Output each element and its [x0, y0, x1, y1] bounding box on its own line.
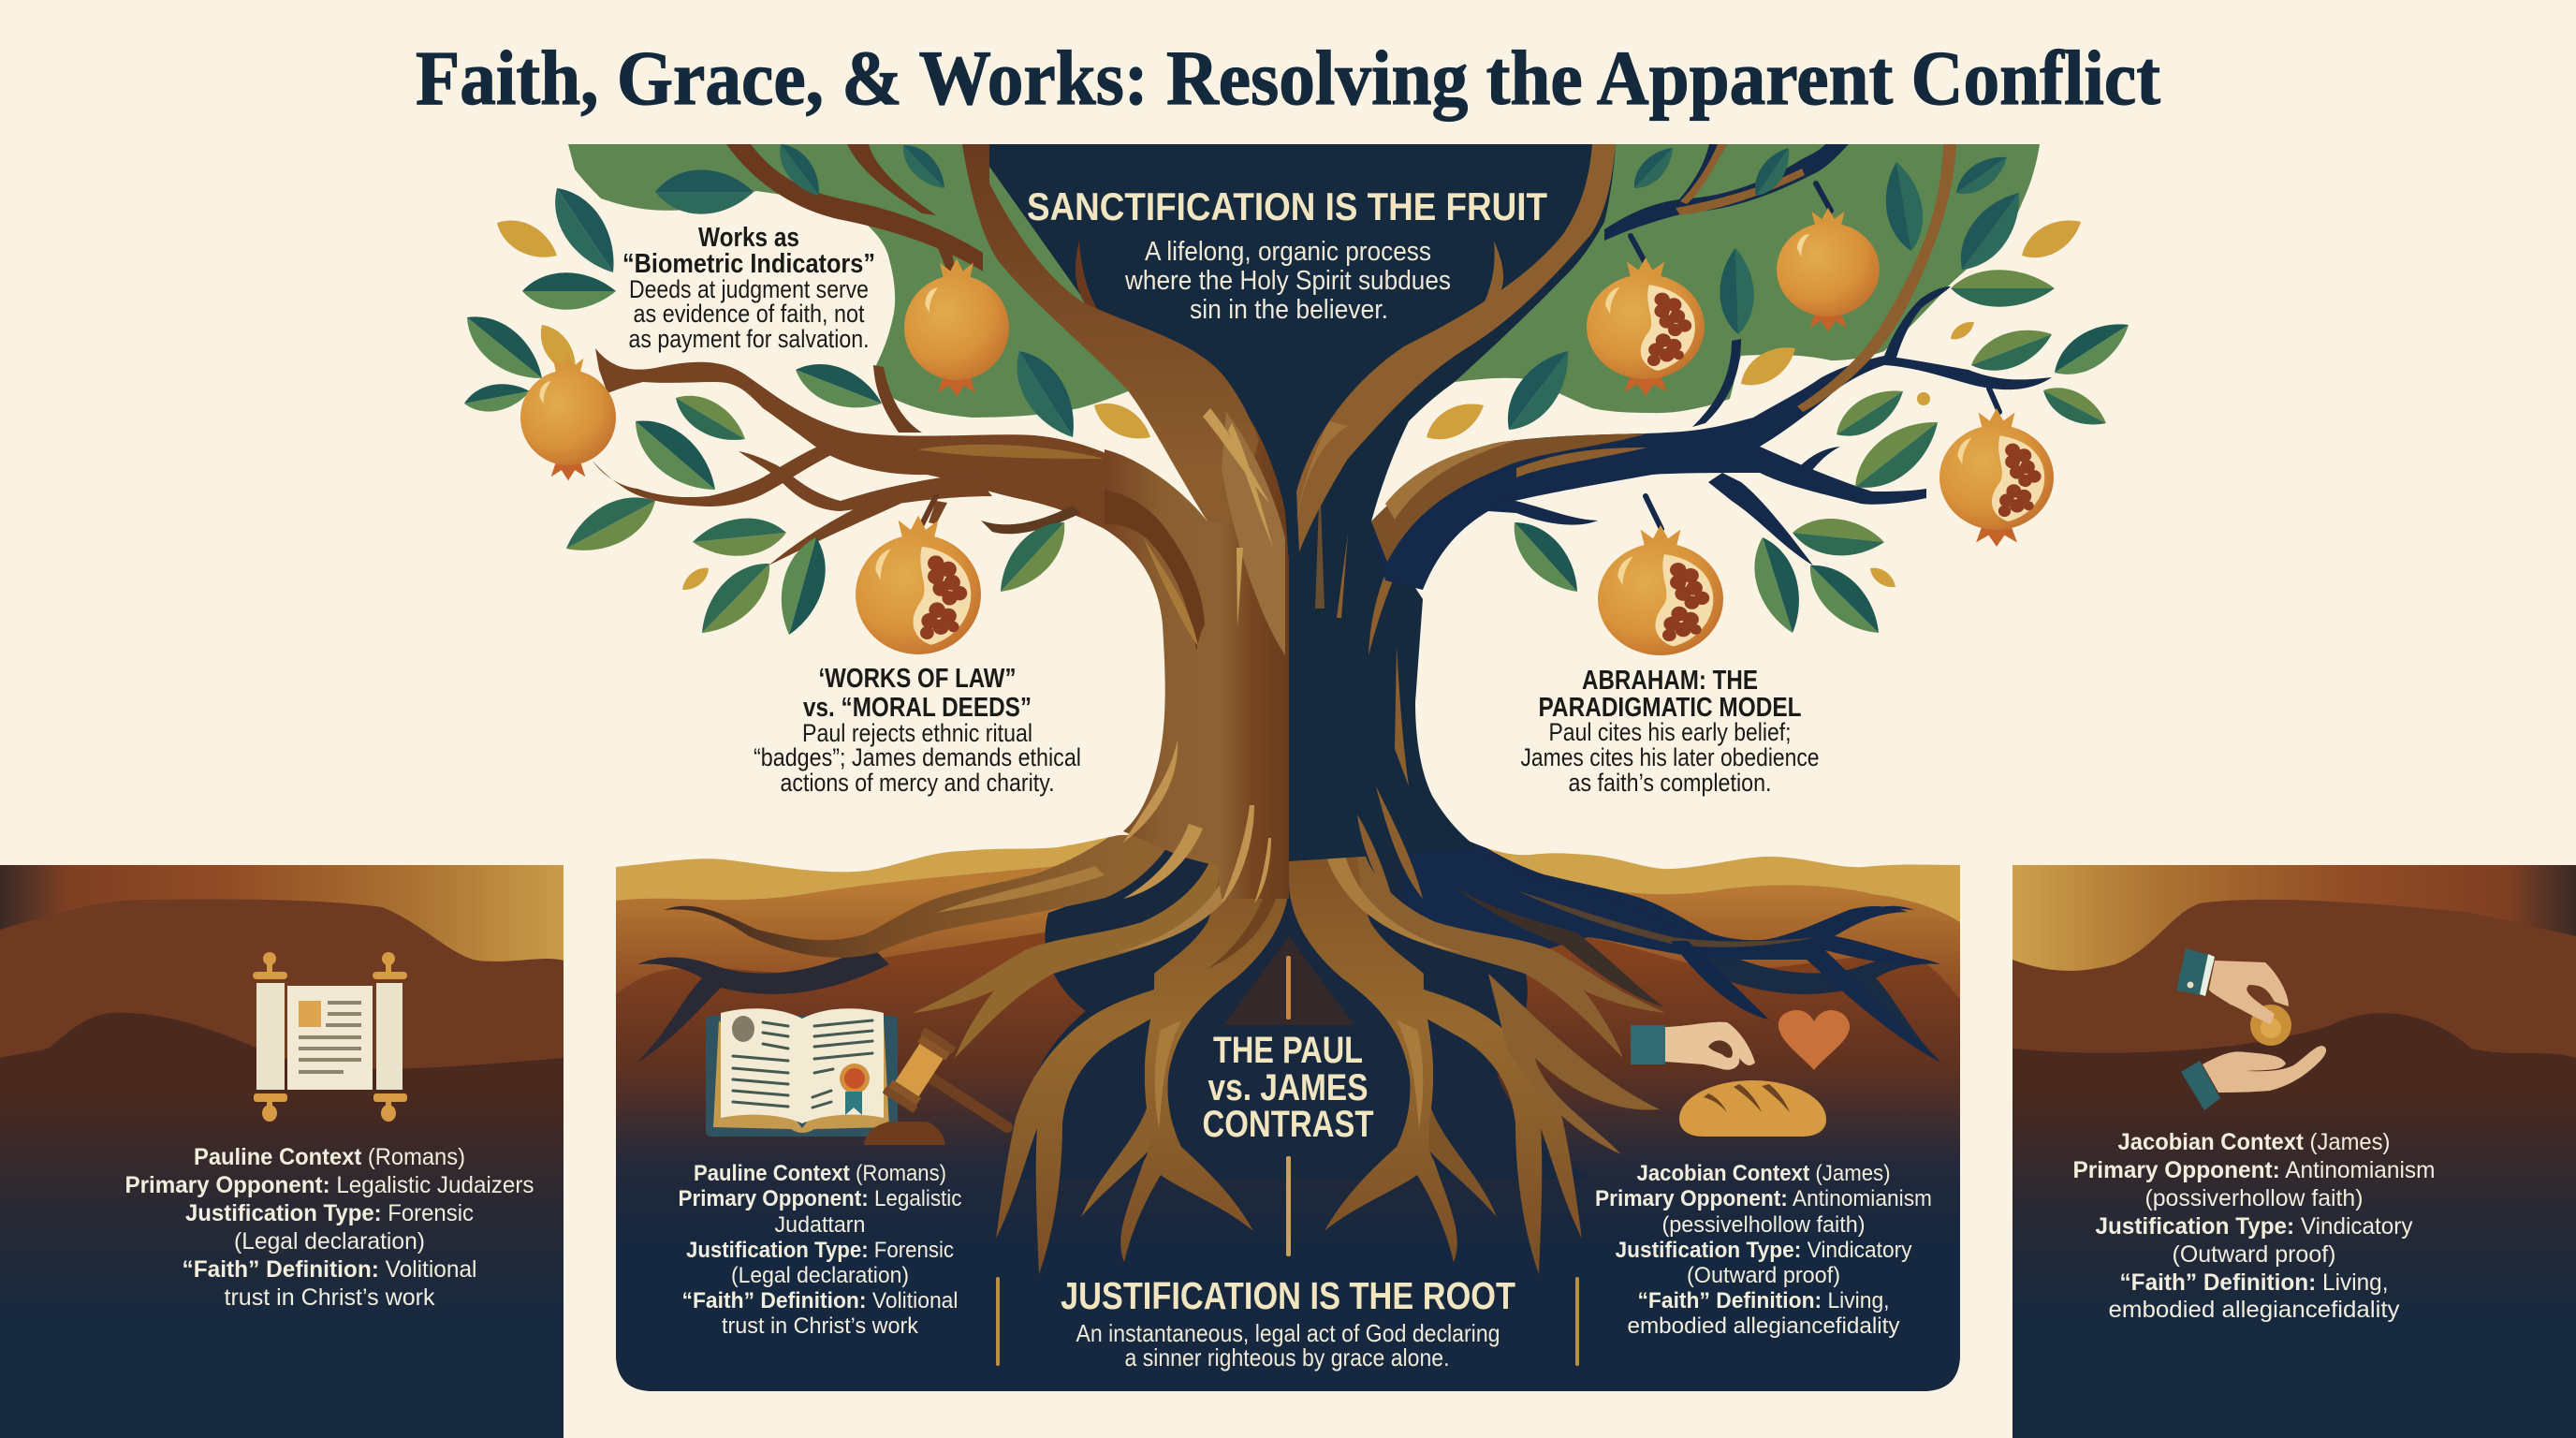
text block: Abraham the paradigmatic model	[1520, 666, 1820, 797]
text block: Abraham the paradigmatic model: ABRAHAM: THE	[1582, 666, 1758, 696]
fruit: top right whole pomegranate	[1777, 208, 1880, 331]
heading: the Paul vs James contrast	[1202, 1030, 1374, 1145]
text block: works as biometric indicators: “Biometric Indicators”	[622, 249, 875, 279]
text block: center Pauline context: trust in Christ’s work	[722, 1313, 919, 1339]
text block: Jacobian context: (Outward proof)	[2172, 1241, 2336, 1268]
leaves: right side	[1420, 140, 2138, 646]
text block: Jacobian context: Primary Opponent: Antinomianism	[2072, 1157, 2436, 1183]
text block: center Jacobian context: (Outward proof)	[1687, 1263, 1840, 1288]
text block: Pauline context: trust in Christ’s work	[225, 1284, 435, 1311]
fruit: upper left whole pomegranate	[904, 258, 1009, 397]
text block: works of law vs moral deeds: “badges”; James demands ethical	[754, 743, 1081, 771]
text block: Pauline context: Primary Opponent: Legalistic Judaizers	[125, 1172, 534, 1198]
icon: heart	[1778, 1010, 1850, 1070]
panel: navy sanctification background and right trunk	[973, 144, 1616, 861]
tree: left limbs and branches	[593, 144, 1208, 599]
root: right dark brown strands	[1454, 887, 1817, 1020]
icon: open book with seal	[706, 1008, 898, 1137]
text block: justification description: a sinner righteous by grace alone.	[1125, 1343, 1449, 1372]
separator: lower right	[1575, 1277, 1579, 1366]
navy shadow beneath the roots	[1011, 829, 1591, 1180]
text block: Pauline context: Pauline Context (Romans)	[194, 1144, 465, 1170]
heading: sanctification: SANCTIFICATION IS THE FRUIT	[1027, 184, 1547, 228]
text block: works as biometric indicators	[622, 223, 875, 353]
panel: left Pauline context	[0, 865, 564, 1438]
tree: brown highlights on right limbs	[1371, 144, 1956, 562]
separator: lower center	[1286, 1156, 1291, 1256]
text block: center Pauline context: Justification Type: Forensic	[686, 1238, 954, 1263]
fruit: lower left cut pomegranate	[856, 516, 981, 654]
heading: justification is the root: JUSTIFICATION IS THE ROOT	[1061, 1274, 1515, 1317]
canopy: right green	[1455, 144, 2040, 413]
text block: works of law vs moral deeds	[754, 664, 1081, 797]
faint rust diamond behind separator	[1223, 936, 1354, 1025]
text block: Abraham the paradigmatic model: PARADIGMATIC MODEL	[1539, 693, 1801, 723]
text block: works of law vs moral deeds: Paul rejects ethnic ritual	[802, 719, 1032, 747]
text block: center Pauline context: Pauline Context (Romans)	[694, 1161, 946, 1186]
text block: center Jacobian context: Jacobian Context (James)	[1636, 1161, 1891, 1186]
text block: center Pauline context: Primary Opponent: Legalistic	[678, 1186, 961, 1211]
text block: sanctification description: A lifelong, organic process	[1145, 237, 1431, 267]
text block: works as biometric indicators: as evidence of faith, not	[633, 300, 865, 328]
icon: gavel	[864, 1027, 1033, 1163]
text block: Jacobian context: (possiverhollow faith)	[2145, 1185, 2363, 1211]
separator: lower left	[996, 1277, 1000, 1366]
separator: upper center	[1286, 956, 1291, 1020]
text block: Abraham the paradigmatic model: as faith’s completion.	[1569, 769, 1771, 797]
text block: Jacobian context: Justification Type: Vindicatory	[2095, 1213, 2413, 1240]
fruit: lower right cut pomegranate	[1598, 525, 1723, 655]
text block: Jacobian context: Jacobian Context (James)	[2117, 1129, 2391, 1155]
tree: right limbs and branches	[1371, 144, 2052, 590]
heading: the Paul vs James contrast: THE PAUL	[1213, 1030, 1363, 1071]
tree: left half of trunk	[1105, 421, 1289, 899]
text block: center Jacobian context: “Faith” Definition: Living,	[1638, 1288, 1889, 1313]
text block: Jacobian context	[2072, 1129, 2436, 1323]
text block: sanctification description: where the Holy Spirit subdues	[1124, 266, 1451, 296]
title: Faith, Grace, & Works: Resolving the Apparent Conflict	[416, 35, 2160, 121]
text block: Abraham the paradigmatic model: James cites his later obedience	[1520, 743, 1820, 771]
root: right thick navy mass	[1404, 854, 1941, 1063]
text block: Pauline context: Justification Type: Forensic	[185, 1200, 474, 1226]
text block: Jacobian context: embodied allegiancefidality	[2108, 1297, 2400, 1323]
text block: Abraham the paradigmatic model: Paul cites his early belief;	[1548, 718, 1792, 746]
text block: works as biometric indicators: Deeds at judgment serve	[629, 275, 869, 303]
text block: sanctification description	[1124, 237, 1451, 325]
icon: hands and coin	[2176, 948, 2326, 1110]
text block: center Jacobian context: Primary Opponent: Antinomianism	[1595, 1186, 1932, 1211]
text block: Pauline context: “Faith” Definition: Volitional	[182, 1256, 477, 1283]
icon: scroll	[253, 952, 407, 1122]
text block: Pauline context: (Legal declaration)	[234, 1228, 425, 1255]
text block: center Jacobian context: (pessivelhollow faith)	[1662, 1212, 1865, 1238]
text block: justification description	[1076, 1319, 1500, 1372]
text block: works of law vs moral deeds: vs. “MORAL DEEDS”	[803, 693, 1032, 723]
roots: right navy and brown	[1397, 824, 1940, 1274]
roots: right brown inner	[1289, 824, 1665, 1262]
text block: center Pauline context: (Legal declaration)	[731, 1263, 909, 1288]
text block: Jacobian context: “Faith” Definition: Living,	[2119, 1269, 2389, 1296]
fruit: upper right cut pomegranate	[1587, 257, 1705, 396]
heading: the Paul vs James contrast: CONTRAST	[1202, 1104, 1374, 1145]
tree: left trunk shading streaks	[1105, 408, 1285, 903]
text block: center Jacobian context	[1595, 1161, 1932, 1339]
tree: left upper limb	[962, 144, 1259, 524]
heading: the Paul vs James contrast: vs. JAMES	[1208, 1067, 1368, 1108]
text block: works of law vs moral deeds: actions of mercy and charity.	[781, 769, 1054, 797]
text block: justification description: An instantaneous, legal act of God declaring	[1076, 1319, 1500, 1347]
text block: Pauline context	[125, 1144, 534, 1311]
root: right extra brown tip	[1488, 974, 1660, 1154]
text block: works as biometric indicators: as payment for salvation.	[629, 325, 869, 353]
panel: right Jacobian context	[2012, 865, 2576, 1438]
roots: left brown	[637, 824, 1289, 1274]
leaves: left side	[455, 137, 1157, 646]
fruit: far right cut pomegranate	[1939, 408, 2054, 547]
fruit: far left whole pomegranate	[520, 355, 616, 480]
text block: center Pauline context: “Faith” Definition: Volitional	[681, 1288, 959, 1313]
text block: center Pauline context: Judattarn	[775, 1212, 865, 1238]
icon: bread loaf	[1679, 1080, 1826, 1137]
text block: works as biometric indicators: Works as	[698, 223, 799, 253]
fruit: stems	[922, 183, 1999, 529]
text block: center Pauline context	[678, 1161, 961, 1339]
icon: giving hand	[1631, 1022, 1755, 1070]
text block: works of law vs moral deeds: ‘WORKS OF LAW”	[818, 664, 1017, 694]
text block: center Jacobian context: Justification Type: Vindicatory	[1616, 1238, 1912, 1263]
tree: right trunk brown streaks	[1295, 144, 1616, 908]
canopy: left green	[568, 144, 1151, 418]
panel: central ground with soil layers	[616, 824, 1960, 1395]
text block: center Jacobian context: embodied allegiancefidality	[1627, 1313, 1900, 1339]
text block: sanctification description: sin in the believer.	[1190, 295, 1388, 325]
